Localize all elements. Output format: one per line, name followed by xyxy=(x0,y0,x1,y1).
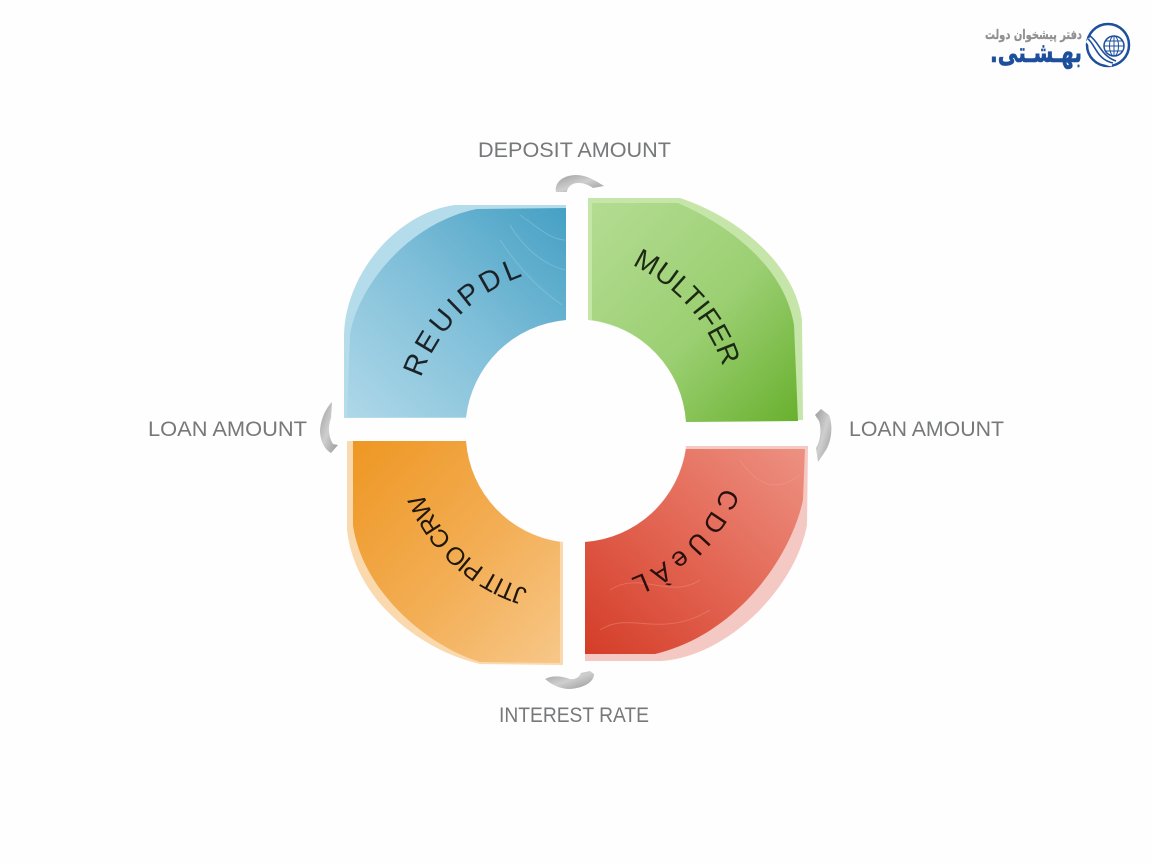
icon: globe emblem xyxy=(1087,24,1129,66)
label: red segment word: CDUeÀL xyxy=(631,491,738,592)
panel: red segment xyxy=(585,446,808,661)
arrow: right xyxy=(815,409,831,462)
heading: left loan amount: LOAN AMOUNT xyxy=(148,418,307,441)
logo xyxy=(985,24,1129,69)
logo text: brand name: بهـشـتی. xyxy=(990,36,1082,69)
arrow: left xyxy=(320,402,338,453)
heading: right loan amount: LOAN AMOUNT xyxy=(849,418,1004,441)
label: blue segment word: REUIPDL xyxy=(403,262,522,376)
label: green segment word: MULTIFER xyxy=(634,248,738,366)
panel: blue segment xyxy=(344,205,566,418)
heading: deposit amount: DEPOSIT AMOUNT xyxy=(478,139,671,162)
label: orange segment word: JTIT PIO CRW xyxy=(407,498,526,604)
arrow: bottom xyxy=(545,671,594,689)
arrow: top xyxy=(556,175,604,192)
heading: interest rate: INTEREST RATE xyxy=(499,704,649,727)
panel: orange segment xyxy=(347,441,563,665)
panel: green segment xyxy=(588,198,803,422)
logo text: office name: دفتر پیشخوان دولت xyxy=(985,28,1082,43)
